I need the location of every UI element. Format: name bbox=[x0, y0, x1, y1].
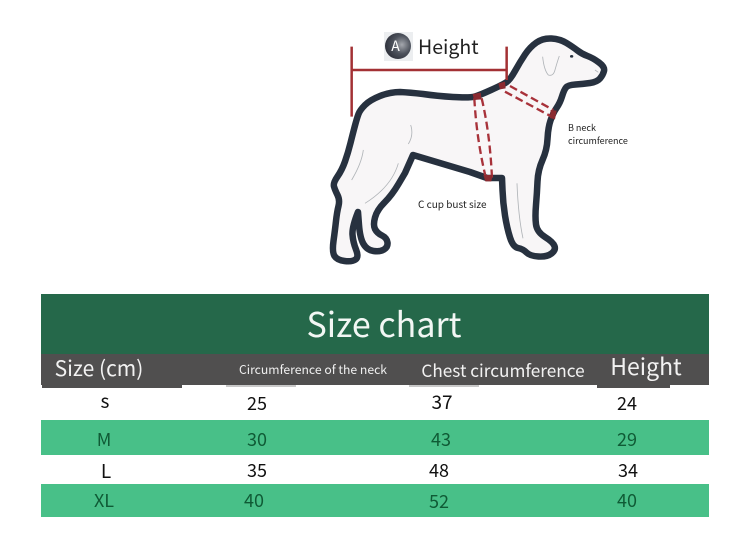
icon: A badge: A bbox=[391, 36, 400, 56]
title band bbox=[41, 294, 709, 354]
row: M: 30 bbox=[247, 426, 267, 452]
row: XL bbox=[41, 484, 709, 517]
row: S bbox=[101, 387, 637, 416]
label: C cup bust size: C cup bust size bbox=[418, 196, 487, 211]
row: S: 37 bbox=[431, 388, 453, 415]
row: S: s bbox=[101, 387, 110, 414]
row: XL: 40 bbox=[617, 487, 637, 513]
header row: Size (cm) bbox=[55, 353, 143, 383]
title: Size chart bbox=[307, 298, 462, 347]
dog ear and face details bbox=[352, 56, 598, 238]
header row: Circumference of the neck bbox=[239, 360, 387, 378]
dog diagram bbox=[333, 38, 604, 261]
chest measure dashes bbox=[474, 98, 492, 178]
row: M bbox=[41, 420, 709, 455]
row: L: 34 bbox=[618, 457, 638, 483]
header row: Height bbox=[610, 348, 682, 382]
dog eye bbox=[570, 55, 573, 58]
label: Height: Height bbox=[418, 31, 479, 60]
row: M: 29 bbox=[617, 426, 637, 452]
row: L: 48 bbox=[429, 457, 449, 483]
row: M: M bbox=[97, 426, 111, 452]
label: B neck circumference: circumference bbox=[568, 134, 628, 147]
row: S: 25 bbox=[247, 390, 267, 416]
measure joints bbox=[473, 82, 557, 181]
neck measure dashes bbox=[505, 86, 553, 117]
row: S: 24 bbox=[617, 390, 637, 416]
header row: Chest circumference bbox=[421, 357, 585, 382]
label: B neck circumference: B neck bbox=[568, 121, 596, 134]
row: XL: 52 bbox=[429, 488, 449, 514]
icon: A badge bbox=[384, 32, 413, 61]
height measure lines bbox=[352, 47, 507, 117]
row: M: 43 bbox=[431, 426, 451, 452]
row: L bbox=[101, 457, 638, 484]
row: XL: 40 bbox=[244, 487, 264, 513]
header row bbox=[41, 348, 709, 388]
size chart table bbox=[41, 294, 709, 517]
dog outline bbox=[333, 38, 604, 261]
row: XL: XL bbox=[94, 487, 114, 513]
row: L: 35 bbox=[247, 457, 267, 483]
row: L: L bbox=[101, 457, 111, 484]
